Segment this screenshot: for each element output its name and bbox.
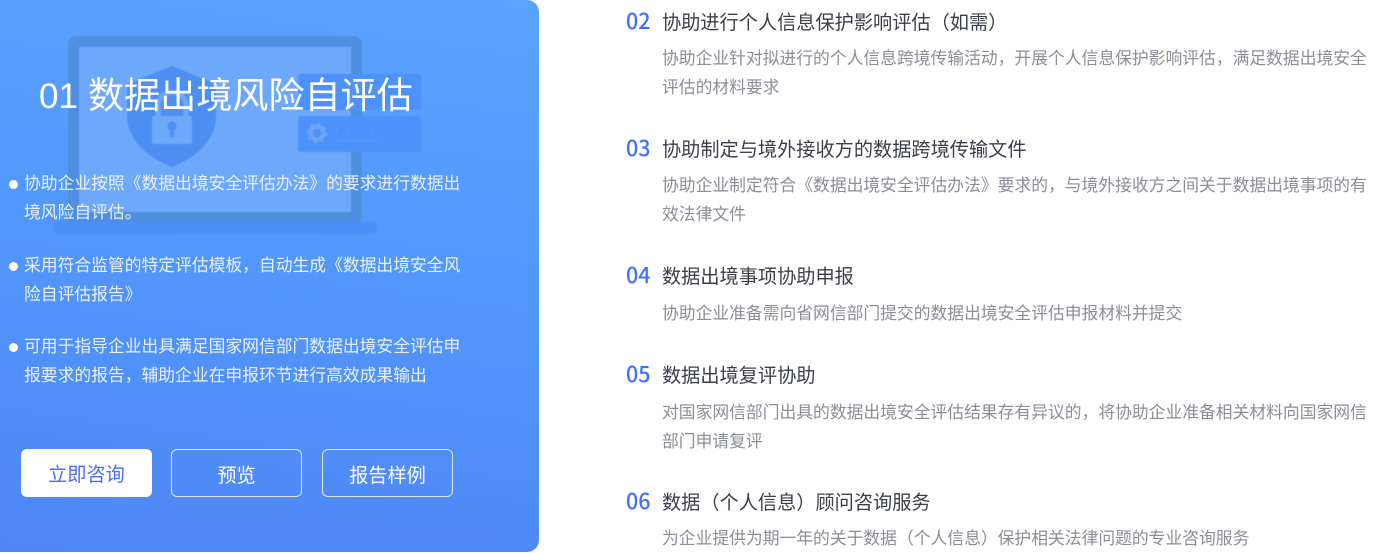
- illustration: laptop with shield and lock: [68, 36, 421, 233]
- item 06: [626, 485, 1249, 548]
- title: 01 数据出境风险自评估: [39, 75, 413, 116]
- item 03: 03: [626, 132, 651, 163]
- button: consult now: [21, 449, 152, 497]
- bullet 2: 采用符合监管的特定评估模板，自动生成《数据出境安全风: [24, 256, 460, 275]
- item 04: 04: [626, 259, 651, 290]
- bullet 3: 可用于指导企业出具满足国家网信部门数据出境安全评估申: [24, 337, 460, 356]
- item 03: 协助企业制定符合《数据出境安全评估办法》要求的，与境外接收方之间关于数据出境事项的有: [662, 176, 1367, 195]
- item 02: 02: [626, 5, 651, 36]
- bullet 3: [9, 337, 460, 385]
- button: preview: 预览: [217, 466, 256, 487]
- bullet list: [9, 174, 460, 385]
- button: preview: [171, 449, 302, 497]
- panel: data export risk self-assessment: [0, 0, 539, 552]
- item 06: 数据（个人信息）顾问咨询服务: [662, 493, 931, 514]
- item 05: [626, 358, 1367, 451]
- item 03: [626, 132, 1367, 224]
- item 05: 对国家网信部门出具的数据出境安全评估结果存有异议的，将协助企业准备相关材料向国家网信: [662, 403, 1367, 422]
- item 02: 评估的材料要求: [662, 78, 779, 97]
- bullet 1: 协助企业按照《数据出境安全评估办法》的要求进行数据出: [24, 174, 460, 193]
- bullet 1: 境风险自评估。: [24, 203, 141, 222]
- item 05: 05: [626, 358, 651, 389]
- item 06: 06: [626, 485, 651, 516]
- item 04: 协助企业准备需向省网信部门提交的数据出境安全评估申报材料并提交: [662, 304, 1182, 323]
- item 03: 效法律文件: [662, 205, 746, 224]
- item 02: 协助进行个人信息保护影响评估（如需）: [662, 13, 1007, 34]
- bullet 3: 报要求的报告，辅助企业在申报环节进行高效成果输出: [24, 366, 427, 385]
- item 03: 协助制定与境外接收方的数据跨境传输文件: [662, 140, 1027, 161]
- button: report sample: 报告样例: [349, 466, 426, 487]
- item 05: 数据出境复评协助: [662, 366, 816, 387]
- item 06: 为企业提供为期一年的关于数据（个人信息）保护相关法律问题的专业咨询服务: [662, 529, 1249, 548]
- item 02: 协助企业针对拟进行的个人信息跨境传输活动，开展个人信息保护影响评估，满足数据出境安全: [662, 49, 1367, 68]
- bullet 2: 险自评估报告》: [24, 285, 141, 304]
- button: consult now: 立即咨询: [48, 465, 125, 486]
- item 04: [626, 259, 1182, 323]
- button: report sample: [322, 449, 453, 497]
- item 05: 部门申请复评: [662, 432, 763, 451]
- bullet 2: [9, 256, 460, 304]
- item 04: 数据出境事项协助申报: [662, 267, 854, 288]
- item 02: [626, 5, 1367, 97]
- bullet 1: [9, 174, 460, 222]
